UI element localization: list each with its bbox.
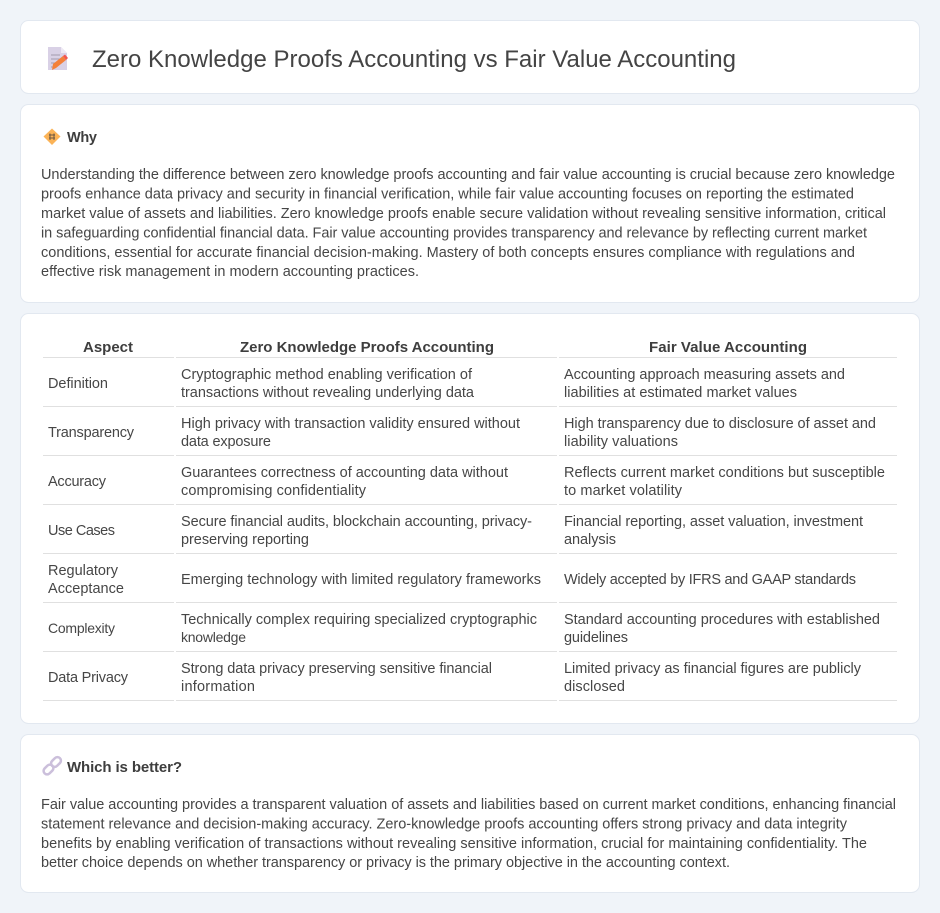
text block: verdict paragraph: statement relevance and decision-making accuracy. Zero-knowledge proofs accounting offers strong privacy and data integrity <box>41 816 848 832</box>
icon: orange diamond <box>44 128 60 145</box>
row: use cases: Secure financial audits, blockchain accounting, privacy- <box>181 514 532 530</box>
row: definition <box>48 367 845 401</box>
row: use cases: analysis <box>564 532 616 548</box>
row: definition: liabilities at estimated market values <box>564 385 797 401</box>
row: data privacy: disclosed <box>564 679 625 695</box>
row: transparency <box>48 416 876 450</box>
text block: why paragraph: Understanding the difference between zero knowledge proofs accounting and fair value accounting is crucial because zero knowledge <box>41 167 895 183</box>
panel: comparison table <box>20 314 920 724</box>
row: use cases: Use Cases <box>48 523 115 539</box>
row: accuracy: Guarantees correctness of accounting data without <box>181 465 508 481</box>
row: transparency: High transparency due to disclosure of asset and <box>564 416 876 432</box>
text block: why paragraph: proofs enhance data privacy and security in financial verification, while fair value accounting focuses on reporting the estimated <box>41 186 854 202</box>
row: transparency: liability valuations <box>564 434 678 450</box>
row: complexity <box>48 612 880 646</box>
row: complexity: Complexity <box>48 620 115 636</box>
panel: header <box>20 20 920 94</box>
panel: which is better <box>20 734 920 892</box>
row: use cases: preserving reporting <box>181 532 309 548</box>
row: definition: Accounting approach measuring assets and <box>564 367 845 383</box>
title: Zero Knowledge Proofs Accounting vs Fair Value Accounting <box>92 46 736 73</box>
panel: why <box>20 104 920 302</box>
row: complexity: Standard accounting procedures with established <box>564 612 880 628</box>
table header row: Aspect <box>83 339 133 356</box>
row: complexity: guidelines <box>564 630 628 646</box>
text block: why paragraph: market value of assets and liabilities. Zero knowledge proofs enable secure validation without revealing sensitive information, critical <box>41 206 886 222</box>
row: data privacy: Data Privacy <box>48 670 129 686</box>
row: use cases <box>48 514 863 548</box>
row: regulatory acceptance: Regulatory <box>48 563 119 579</box>
row: data privacy: information <box>181 679 255 695</box>
row: complexity: knowledge <box>181 629 246 645</box>
row: definition: Cryptographic method enabling verification of <box>181 367 473 383</box>
text block: why paragraph: effective risk management in modern accounting practices. <box>41 264 419 280</box>
row: data privacy: Strong data privacy preserving sensitive financial <box>181 661 492 677</box>
row: accuracy: compromising confidentiality <box>181 483 367 499</box>
row: regulatory acceptance <box>48 563 856 597</box>
icon: chain link <box>42 756 62 776</box>
row: data privacy: Limited privacy as financial figures are publicly <box>564 661 862 677</box>
row: regulatory acceptance: Emerging technology with limited regulatory frameworks <box>181 572 541 588</box>
row: transparency: Transparency <box>48 425 135 441</box>
row: definition: Definition <box>48 376 108 392</box>
text block: verdict paragraph: Fair value accounting provides a transparent valuation of assets and liabilities based on current market conditions, enhancing financial <box>41 797 896 813</box>
text block: why paragraph: conditions, essential for accurate financial decision-making. Mastery of both concepts ensures compliance with regulations and <box>41 245 855 261</box>
row: complexity: Technically complex requiring specialized cryptographic <box>181 612 537 628</box>
text block: verdict paragraph: better choice depends on whether transparency or privacy is the primary objective in the accounting context. <box>41 855 730 871</box>
row: use cases: Financial reporting, asset valuation, investment <box>564 514 863 530</box>
row: data privacy <box>48 661 862 695</box>
row: definition: transactions without revealing underlying data <box>181 385 475 401</box>
row: regulatory acceptance: Widely accepted by IFRS and GAAP standards <box>564 572 856 588</box>
text block: verdict paragraph: benefits by enabling verification of transactions without revealing sensitive information, crucial for maintaining confidentiality. The <box>41 836 867 852</box>
text block: why paragraph: in safeguarding confidential financial data. Fair value accounting provides transparency and relevance by reflecting current market <box>41 226 867 242</box>
row: accuracy: Reflects current market conditions but susceptible <box>564 465 885 481</box>
heading: which is better: Which is better? <box>67 759 182 776</box>
text block: verdict paragraph <box>41 797 896 871</box>
row: regulatory acceptance: Acceptance <box>48 581 124 597</box>
table header row <box>83 339 807 356</box>
icon: memo with pencil <box>48 47 68 70</box>
row: transparency: data exposure <box>181 434 271 450</box>
table header row: Zero Knowledge Proofs Accounting <box>240 339 494 356</box>
row: transparency: High privacy with transaction validity ensured without <box>181 416 520 432</box>
heading: why: Why <box>67 130 97 146</box>
row: accuracy: to market volatility <box>564 483 683 499</box>
row: accuracy <box>48 465 885 499</box>
text block: why paragraph <box>41 167 895 280</box>
table header row: Fair Value Accounting <box>649 339 807 356</box>
row: accuracy: Accuracy <box>48 474 107 490</box>
